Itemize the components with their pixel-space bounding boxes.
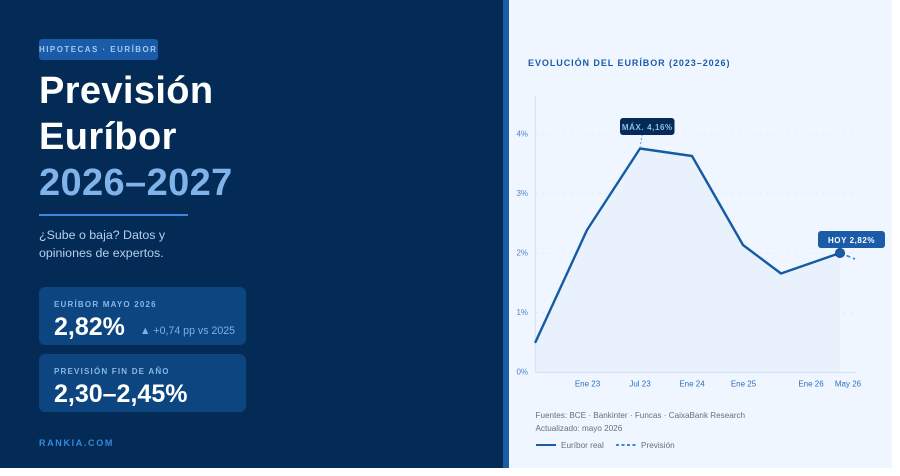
euribor real line — [536, 148, 840, 342]
title — [39, 70, 233, 204]
chart heading: EVOLUCIÓN DEL EURÍBOR (2023–2026) — [528, 58, 730, 68]
area under line — [536, 148, 840, 372]
y axis labels: 3% — [516, 189, 528, 198]
callout: hoy: HOY 2,82% — [828, 236, 875, 245]
current point marker — [836, 248, 844, 258]
x axis labels: Ene 25 — [731, 380, 757, 388]
x axis labels: May 26 — [835, 380, 862, 388]
panel: left cover — [0, 0, 503, 468]
x axis labels: Ene 24 — [679, 380, 705, 388]
callout: hoy — [818, 231, 885, 248]
title underline — [39, 214, 188, 216]
callout: max: MÁX. 4,16% — [622, 123, 673, 132]
subtitle — [39, 228, 165, 260]
card: prevision fin de año — [39, 354, 246, 412]
forecast dashed line — [840, 253, 855, 259]
y axis labels — [516, 130, 528, 376]
title: 2026–2027 — [39, 162, 233, 204]
sources: Actualizado: mayo 2026 — [536, 424, 622, 433]
callout: max — [620, 118, 674, 135]
card value: 2,30–2,45% — [54, 380, 187, 408]
legend: forecast: Previsión — [641, 440, 675, 450]
sources — [536, 410, 745, 433]
y axis labels: 0% — [516, 368, 528, 376]
accent stripe — [503, 0, 509, 468]
x axis labels: Ene 23 — [575, 380, 601, 388]
card label: EURÍBOR MAYO 2026 — [54, 300, 157, 309]
axes — [535, 96, 856, 372]
y axis labels: 1% — [516, 308, 528, 317]
legend: real: Euríbor real — [561, 440, 604, 450]
sources: Fuentes: BCE · Bankinter · Funcas · CaixaBank Research — [536, 410, 745, 420]
title: Previsión — [39, 70, 214, 112]
panel: chart — [509, 0, 892, 468]
card value: 2,82% — [54, 313, 125, 341]
tag: hipotecas: HIPOTECAS · EURÍBOR — [39, 45, 157, 54]
brand: RANKIA.COM — [39, 438, 114, 448]
card: euribor mayo 2026 — [39, 287, 246, 345]
legend — [536, 440, 675, 450]
x axis labels — [575, 380, 862, 388]
title: Euríbor — [39, 116, 177, 158]
y axis labels: 2% — [516, 248, 528, 258]
subtitle: opiniones de expertos. — [39, 246, 164, 260]
x axis labels: Ene 26 — [798, 380, 824, 388]
card delta: ▲ +0,74 pp vs 2025 — [140, 325, 235, 337]
tag: hipotecas — [39, 39, 158, 60]
card label: PREVISIÓN FIN DE AÑO — [54, 367, 170, 376]
peak connector — [640, 135, 642, 148]
x axis labels: Jul 23 — [629, 380, 651, 388]
subtitle: ¿Sube o baja? Datos y — [39, 228, 165, 242]
y axis labels: 4% — [516, 130, 528, 138]
